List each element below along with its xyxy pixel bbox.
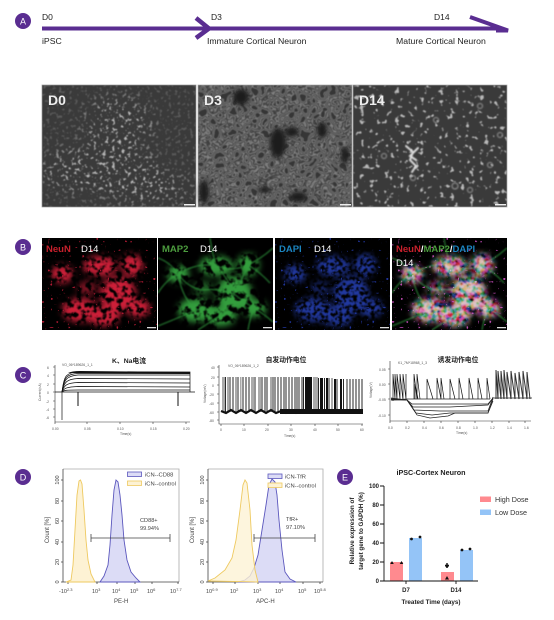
axis tick labels: 60 xyxy=(372,522,380,528)
chart: K/Na currents: 0.15 xyxy=(150,427,157,431)
chart: spontaneous action potentials: 50 xyxy=(336,428,340,432)
image: MAP2 xyxy=(158,238,273,330)
chart: spontaneous action potentials: -80 xyxy=(209,419,214,423)
axis labels xyxy=(190,475,326,605)
micrograph D14 xyxy=(353,85,507,207)
axis labels: 10 xyxy=(112,589,118,595)
histogram: CD88 xyxy=(45,469,182,605)
axis titles xyxy=(349,492,461,606)
chart: evoked action potentials: -0.05 xyxy=(378,398,386,402)
axis labels: 3 xyxy=(259,587,262,592)
axis labels: 5 xyxy=(136,587,139,592)
chart: K/Na currents: 0 xyxy=(47,391,49,395)
timeline stage labels: Mature Cortical Neuron xyxy=(396,36,486,46)
chart: K/Na currents: VO_06*189626_1_1 xyxy=(62,363,93,367)
legend xyxy=(268,474,316,490)
axis labels: 10 xyxy=(230,589,236,595)
chart: spontaneous action potentials xyxy=(203,355,364,438)
chart: evoked action potentials: 1.6 xyxy=(524,426,529,430)
yellow control curve xyxy=(208,480,258,582)
gate xyxy=(91,534,170,542)
chart: spontaneous action potentials: 40 xyxy=(313,428,317,432)
axis labels: 4 xyxy=(118,587,121,592)
chart: K/Na currents: 0.00 xyxy=(52,427,59,431)
image: DAPI xyxy=(275,238,390,330)
chart: spontaneous action potentials: 10 xyxy=(242,428,246,432)
badge A xyxy=(15,13,31,29)
gate label: 99.94% xyxy=(140,526,159,532)
axis labels: 6 xyxy=(153,587,156,592)
chart: K/Na currents: 0.20 xyxy=(183,427,190,431)
axis labels: -10 xyxy=(59,589,67,595)
legend xyxy=(480,495,529,517)
axis labels: 10 xyxy=(147,589,153,595)
gate label: 97.10% xyxy=(286,525,305,531)
gate xyxy=(254,534,315,542)
chart: K/Na currents: Time(s) xyxy=(120,432,131,436)
legend xyxy=(128,472,176,488)
legend: iCN--CD88 xyxy=(145,472,173,478)
axis labels: 0 xyxy=(200,580,206,584)
axis tick labels: 100 xyxy=(369,484,380,490)
badge D: D xyxy=(20,472,27,482)
axis labels: 2.3 xyxy=(67,587,73,592)
arrow: timeline xyxy=(42,17,508,38)
chart: evoked action potentials: -0.10 xyxy=(378,414,386,418)
micrograph D3: D3 xyxy=(204,92,222,108)
axis labels: 5.8 xyxy=(320,587,326,592)
chart: K/Na currents: 0.10 xyxy=(117,427,124,431)
chart: K/Na currents: 2 xyxy=(47,383,49,387)
axis labels: 40 xyxy=(200,539,206,545)
chart title: 自发动作电位 xyxy=(266,355,307,364)
chart: spontaneous action potentials: -40 xyxy=(209,402,214,406)
chart: K/Na currents: 0.05 xyxy=(84,427,91,431)
blue TfR curve xyxy=(238,479,296,582)
chart: spontaneous action potentials: 0 xyxy=(212,384,214,388)
axis labels: 100 xyxy=(200,475,206,485)
chart: evoked action potentials: 0.4 xyxy=(422,426,427,430)
chart: K/Na currents: -2 xyxy=(46,400,49,404)
axis labels: 0 xyxy=(55,580,61,584)
panel E: gene expression bar chart xyxy=(337,468,529,606)
badge B: B xyxy=(20,242,26,252)
histogram: TfR xyxy=(190,469,326,605)
chart: spontaneous action potentials: Time(s) xyxy=(284,434,295,438)
chart: spontaneous action potentials: -20 xyxy=(209,393,214,397)
axis labels: 7.7 xyxy=(176,587,182,592)
chart: evoked action potentials: 0.6 xyxy=(439,426,444,430)
data points xyxy=(390,536,471,580)
chart: evoked action potentials: 0.8 xyxy=(456,426,461,430)
legend: iCN-TfR xyxy=(285,474,306,480)
chart: K/Na currents: -4 xyxy=(46,408,49,412)
badge D xyxy=(15,469,31,485)
axis labels: 20 xyxy=(55,559,61,565)
chart title: iPSC-Cortex Neuron xyxy=(396,468,466,477)
legend: High Dose xyxy=(495,495,529,504)
axis labels: Count [%] xyxy=(190,516,196,543)
badge E xyxy=(337,469,353,485)
image: MAP2: MAP2 xyxy=(162,244,188,255)
chart: spontaneous action potentials: VO_06*189626_1_2 xyxy=(228,364,259,368)
axis labels xyxy=(45,475,182,605)
axis labels: 10 xyxy=(253,589,259,595)
timeline day labels: D14 xyxy=(434,12,450,22)
image: MAP2: D14 xyxy=(200,244,217,255)
axis tick labels: 20 xyxy=(372,560,380,566)
image: DAPI: DAPI xyxy=(279,244,302,255)
image: NeuN xyxy=(42,238,157,330)
axis labels: 2 xyxy=(236,587,239,592)
axis tick labels: 80 xyxy=(372,503,380,509)
axis titles: Treated Time (days) xyxy=(401,599,461,606)
axis labels: 3 xyxy=(98,587,101,592)
panel A: bright-field micrographs xyxy=(42,85,507,207)
axis labels: 0.9 xyxy=(212,587,218,592)
badge E: E xyxy=(342,472,348,482)
legend: iCN--control xyxy=(285,484,316,490)
timeline stage labels xyxy=(42,36,486,46)
yellow control curve xyxy=(66,480,95,582)
badge C: C xyxy=(20,370,27,380)
chart: spontaneous action potentials: 0 xyxy=(220,428,222,432)
axis tick labels: 0 xyxy=(376,579,380,585)
chart: evoked action potentials: 1.0 xyxy=(473,426,478,430)
axis labels: 60 xyxy=(55,518,61,524)
axis labels: PE-H xyxy=(114,599,128,605)
image: merged xyxy=(392,238,507,330)
chart: evoked action potentials xyxy=(369,355,532,435)
axis labels: 10 xyxy=(314,589,320,595)
chart: spontaneous action potentials: 40 xyxy=(211,366,215,370)
axis tick labels xyxy=(369,484,462,594)
axis labels: 80 xyxy=(55,498,61,504)
chart: K/Na currents: Current(nA) xyxy=(38,383,42,401)
badge C xyxy=(15,367,31,383)
gate label xyxy=(140,518,159,532)
chart: evoked action potentials: 0.2 xyxy=(405,426,410,430)
image: merged: NeuN/MAP2/DAPI xyxy=(396,244,475,255)
legend: iCN--control xyxy=(145,482,176,488)
chart: K/Na currents: 6 xyxy=(47,366,49,370)
axis titles: target gene to GAPDH (%) xyxy=(358,492,365,570)
micrograph D0: D0 xyxy=(48,92,66,108)
badge B xyxy=(15,239,31,255)
micrograph D0 xyxy=(42,85,196,207)
chart: evoked action potentials: 1.4 xyxy=(507,426,512,430)
axis titles: Relative expression of xyxy=(349,497,356,564)
micrograph D14: D14 xyxy=(359,92,385,108)
timeline day labels: D0 xyxy=(42,12,53,22)
axis tick labels: D7 xyxy=(402,588,410,594)
micrograph D3 xyxy=(198,85,352,207)
chart title: 诱发动作电位 xyxy=(438,355,479,364)
axis tick labels: 40 xyxy=(372,541,380,547)
blue CD88 curve xyxy=(100,480,140,582)
chart: evoked action potentials: Voltage(V) xyxy=(369,382,373,398)
chart: evoked action potentials: 1.2 xyxy=(490,426,495,430)
gate label: CD88+ xyxy=(140,518,158,524)
axis labels: 80 xyxy=(200,498,206,504)
axis labels: APC-H xyxy=(256,599,275,605)
chart: spontaneous action potentials: 60 xyxy=(360,428,364,432)
axis labels: 100 xyxy=(55,475,61,485)
axis labels: 4 xyxy=(281,587,284,592)
chart: spontaneous action potentials: -60 xyxy=(209,411,214,415)
bars xyxy=(390,538,473,581)
legend: Low Dose xyxy=(495,508,527,517)
axis labels: 10 xyxy=(92,589,98,595)
timeline stage labels: Immature Cortical Neuron xyxy=(207,36,307,46)
chart: spontaneous action potentials: 30 xyxy=(289,428,293,432)
axis labels: 10 xyxy=(275,589,281,595)
timeline day labels xyxy=(42,12,450,22)
image: merged: D14 xyxy=(396,258,413,269)
timeline day labels: D3 xyxy=(211,12,222,22)
chart: evoked action potentials: Time(s) xyxy=(456,431,467,435)
panel B: immunofluorescence xyxy=(15,238,507,330)
axis labels: 5 xyxy=(304,587,307,592)
chart: evoked action potentials: K1_7M*18968_1_3 xyxy=(398,361,427,365)
panel D: flow cytometry xyxy=(15,469,326,605)
axis labels: 20 xyxy=(200,559,206,565)
axis labels: 60 xyxy=(200,518,206,524)
chart: spontaneous action potentials: 20 xyxy=(211,376,215,380)
chart: evoked action potentials: 0.00 xyxy=(379,383,386,387)
axis labels: 40 xyxy=(55,539,61,545)
chart: evoked action potentials: 0.05 xyxy=(379,368,386,372)
panel A: differentiation timeline xyxy=(15,12,508,46)
axes xyxy=(380,486,478,584)
chart: K/Na currents: 4 xyxy=(47,374,49,378)
gate label xyxy=(286,517,305,531)
chart: K/Na currents xyxy=(38,356,195,436)
chart title: K、Na电流 xyxy=(112,356,146,365)
image: NeuN: D14 xyxy=(81,244,98,255)
chart: evoked action potentials: 0.0 xyxy=(388,426,393,430)
image: DAPI: D14 xyxy=(314,244,331,255)
axis labels: Count [%] xyxy=(45,516,51,543)
badge A: A xyxy=(20,16,26,26)
chart: spontaneous action potentials: Voltage(mV) xyxy=(203,384,207,403)
panel C: electrophysiology xyxy=(15,355,532,438)
axis labels: 10 xyxy=(130,589,136,595)
chart: spontaneous action potentials: 20 xyxy=(265,428,269,432)
axis labels: 10 xyxy=(206,589,212,595)
image: NeuN: NeuN xyxy=(46,244,71,255)
gate label: TfR+ xyxy=(286,517,298,523)
axis tick labels: D14 xyxy=(450,588,462,594)
timeline stage labels: iPSC xyxy=(42,36,62,46)
axis labels: 10 xyxy=(170,589,176,595)
chart: K/Na currents: -6 xyxy=(46,416,49,420)
axis labels: 10 xyxy=(298,589,304,595)
